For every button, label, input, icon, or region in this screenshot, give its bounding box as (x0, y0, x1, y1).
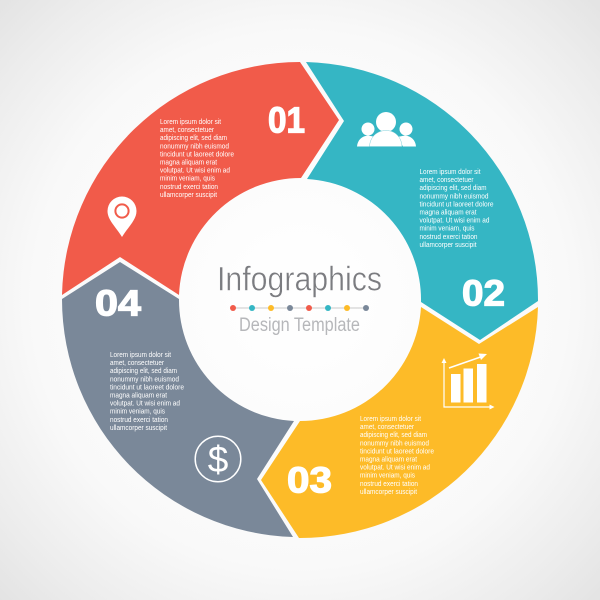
icon: people group (357, 112, 416, 146)
text block 01: nonummy nibh euismod (160, 143, 229, 150)
text block 02: adipiscing elit, sed diam (420, 185, 487, 192)
text block 01: tincidunt ut laoreet dolore (160, 151, 234, 158)
panel: segment 03 yellow (261, 307, 538, 538)
text block 04: nonummy nibh euismod (110, 376, 179, 383)
number 03: 03 (287, 460, 332, 500)
text block 01: amet, consectetuer (160, 127, 215, 134)
number 04: 04 (95, 282, 141, 324)
text block 02: volutpat. Ut wisi enim ad (420, 218, 490, 225)
text block 03: nonummy nibh euismod (360, 440, 429, 447)
text block 04 (110, 352, 184, 432)
text block 01: ullamcorper suscipit (160, 192, 217, 199)
text block 03: magna aliquam erat (360, 456, 417, 464)
text block 01: magna aliquam erat (160, 160, 217, 166)
title: Infographics (217, 260, 382, 298)
text block 03: Lorem ipsum dolor sit (360, 416, 421, 423)
text block 03: tincidunt ut laoreet dolore (360, 448, 434, 455)
text block 03: amet, consectetuer (360, 424, 415, 431)
text block 02 (420, 169, 494, 249)
text block 02: Lorem ipsum dolor sit (420, 169, 481, 176)
icon: location pin (108, 197, 136, 237)
text block 02: ullamcorper suscipit (420, 242, 477, 249)
icon: dollar coin (195, 436, 241, 482)
text block 02: magna aliquam erat (420, 210, 477, 216)
icon: bar chart with arrow (442, 354, 494, 410)
text block 04: magna aliquam erat (110, 392, 167, 400)
number 02: 02 (462, 272, 505, 314)
text block 04: adipiscing elit, sed diam (110, 368, 177, 375)
dotted timeline (230, 305, 369, 311)
panel: segment 04 gray (62, 262, 294, 537)
text block 04: minim veniam, quis (110, 409, 165, 416)
text block 04: amet, consectetuer (110, 360, 165, 367)
text block 03: nostrud exerci tation (360, 481, 418, 488)
text block 03: adipiscing elit, sed diam (360, 432, 427, 439)
text block 02: nostrud exerci tation (420, 234, 478, 241)
text block 02: minim veniam, quis (420, 226, 475, 233)
text block 03: volutpat. Ut wisi enim ad (360, 465, 430, 472)
number 01: 01 (268, 100, 305, 140)
text block 03 (360, 416, 434, 496)
panel: segment 01 red (62, 62, 339, 295)
text block 01 (160, 119, 234, 199)
text block 04: volutpat. Ut wisi enim ad (110, 401, 180, 408)
text block 01: Lorem ipsum dolor sit (160, 119, 221, 126)
text block 01: nostrud exerci tation (160, 184, 218, 191)
subtitle: Design Template (239, 315, 360, 336)
text block 01: volutpat. Ut wisi enim ad (160, 168, 230, 175)
text block 04: tincidunt ut laoreet dolore (110, 384, 184, 391)
text block 02: nonummy nibh euismod (420, 193, 489, 200)
text block 04: ullamcorper suscipit (110, 425, 167, 432)
text block 01: adipiscing elit, sed diam (160, 135, 227, 142)
text block 04: nostrud exerci tation (110, 417, 168, 424)
icon: dollar coin: $ (208, 439, 228, 480)
text block 02: tincidunt ut laoreet dolore (420, 201, 494, 208)
text block 03: minim veniam, quis (360, 473, 415, 480)
text block 02: amet, consectetuer (420, 177, 474, 184)
text block 04: Lorem ipsum dolor sit (110, 352, 171, 359)
text block 03: ullamcorper suscipit (360, 489, 417, 496)
text block 01: minim veniam, quis (160, 176, 215, 183)
panel: segment 02 teal (306, 62, 538, 340)
center title block (217, 260, 382, 336)
